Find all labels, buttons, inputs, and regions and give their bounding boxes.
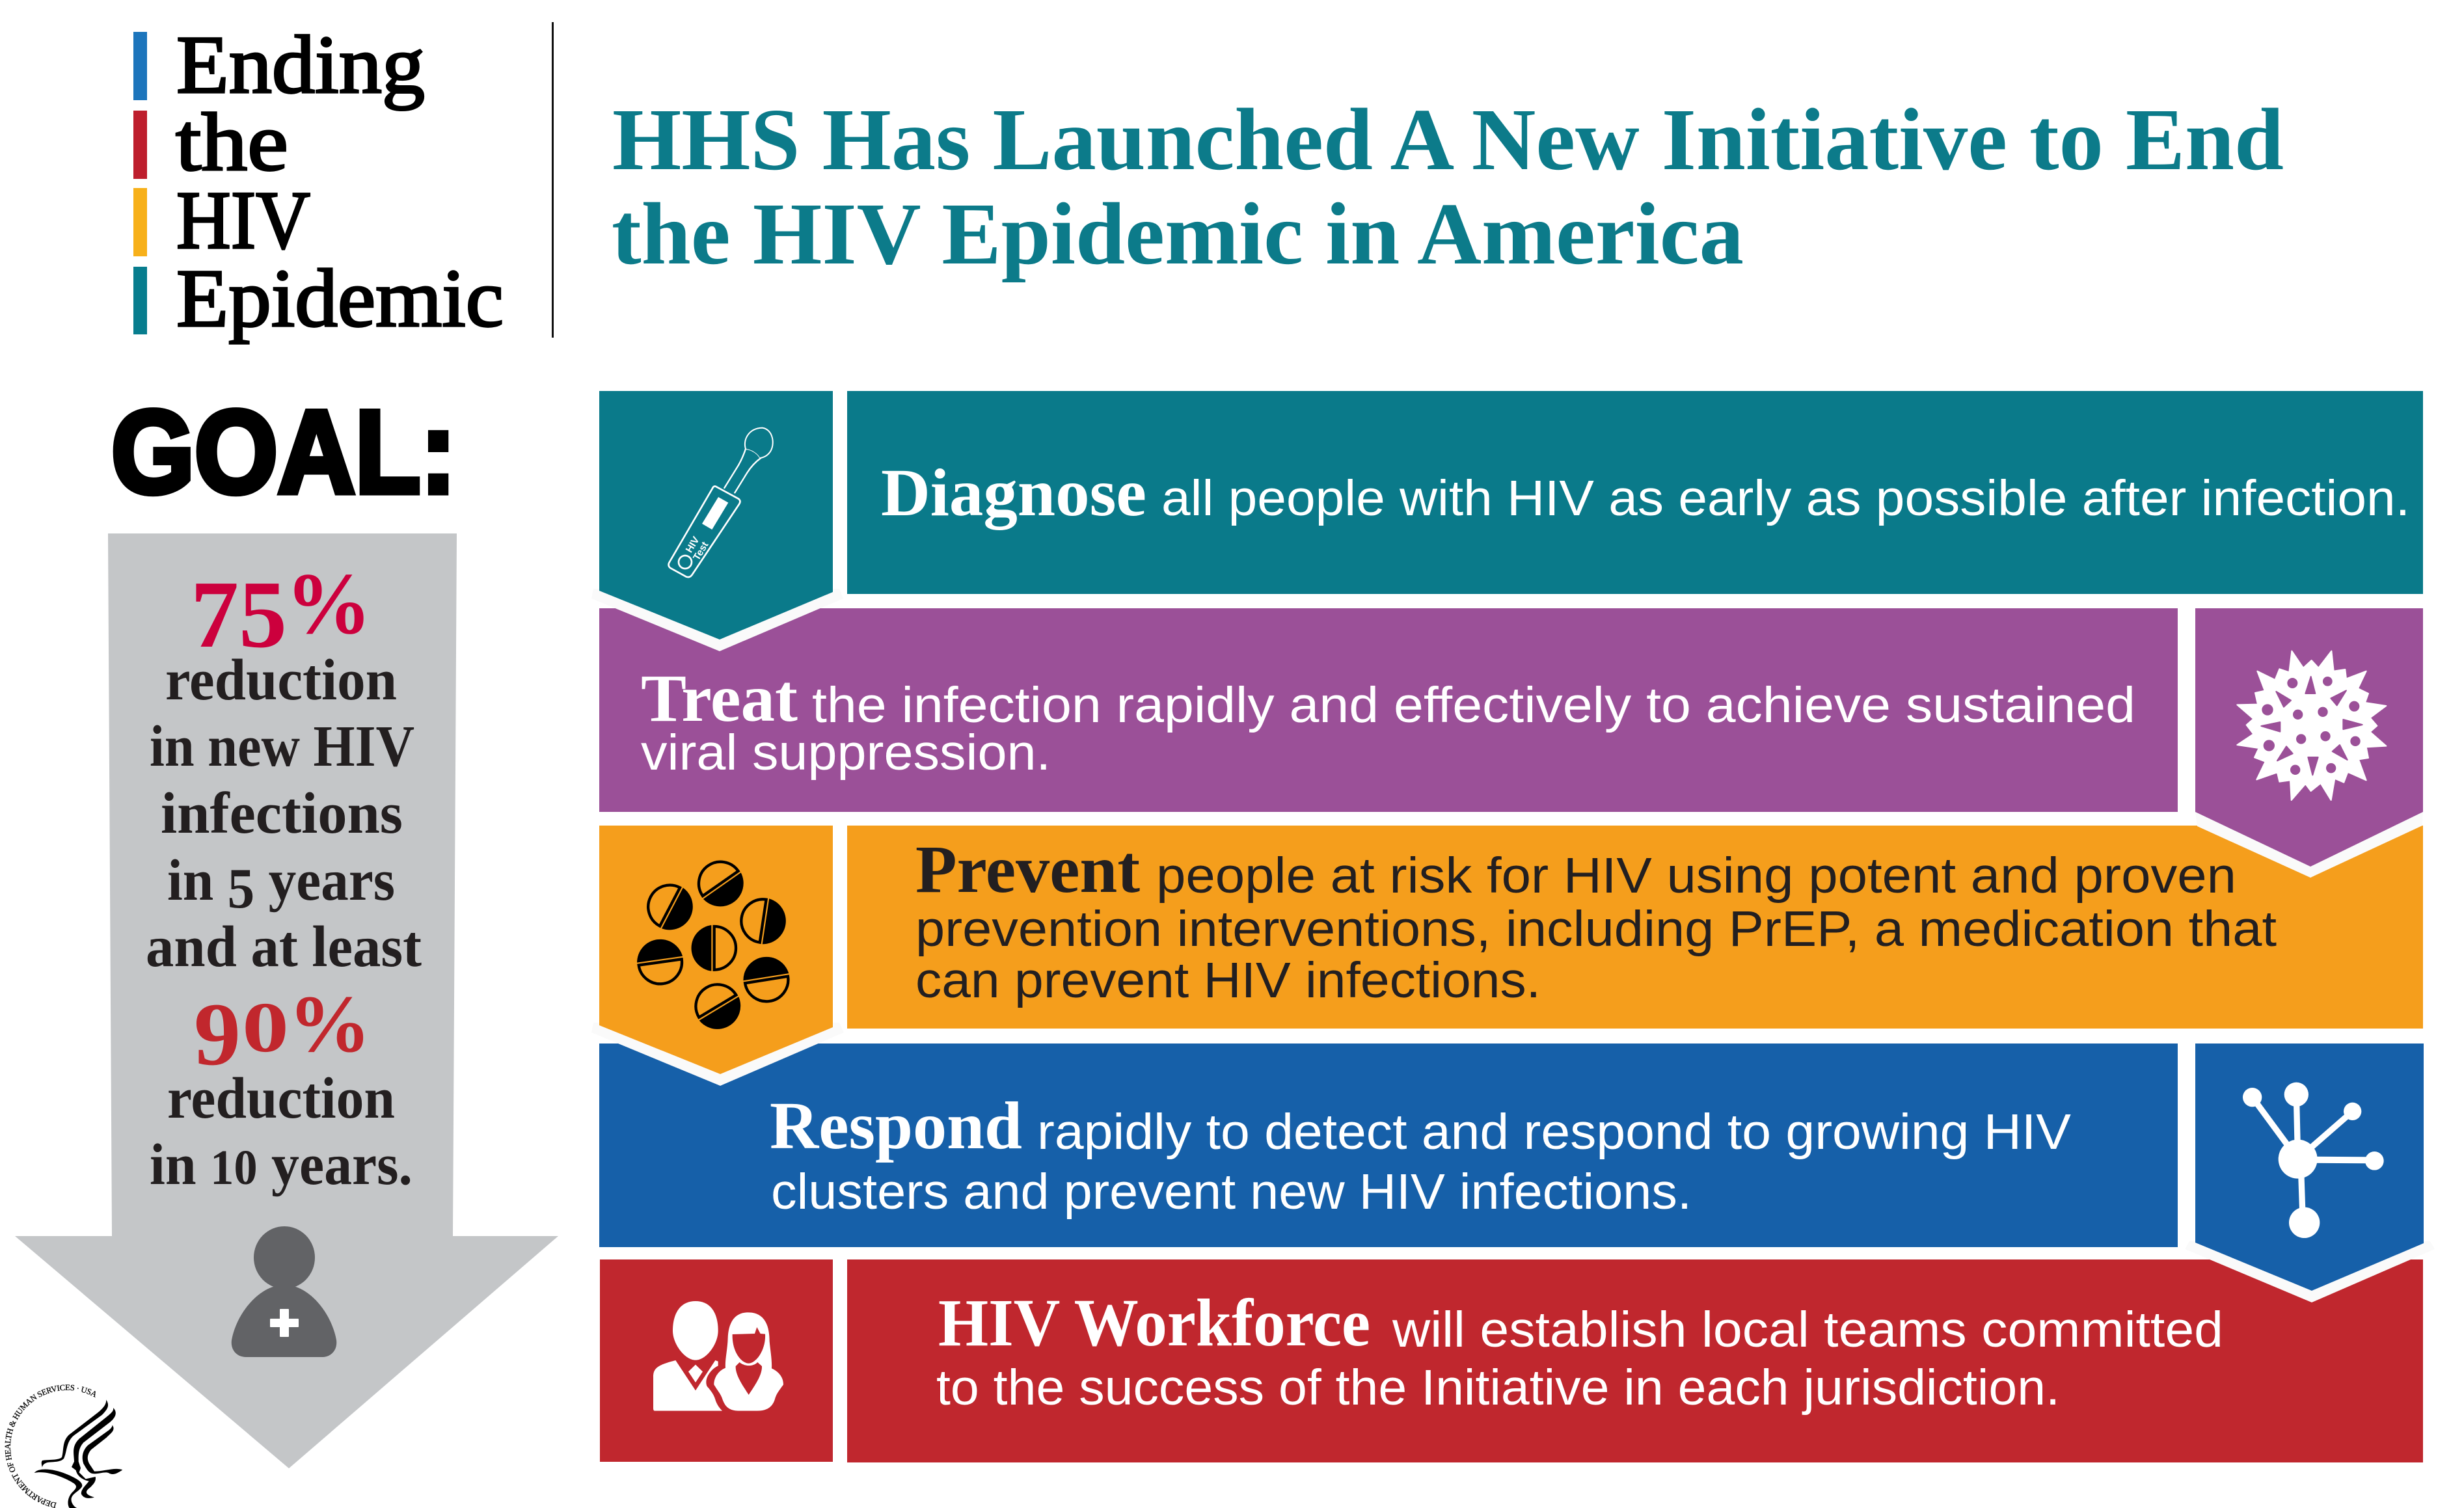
prevent text: prevention interventions, including PrEP, a medication that — [915, 901, 2277, 957]
goal text: 75 percent in 5 years, 90 percent in 10 years: reduction — [167, 1066, 395, 1131]
icon: HIV test swab: HIV — [684, 534, 702, 555]
workforce icon tile — [600, 1259, 833, 1462]
workforce text — [936, 1286, 2223, 1416]
goal text: 75 percent in 5 years, 90 percent in 10 years: in new HIV — [150, 714, 414, 779]
respond band — [599, 1043, 2178, 1247]
icon: split pills — [634, 853, 792, 1038]
goal text: 75 percent in 5 years, 90 percent in 10 years: 5 — [228, 857, 254, 921]
logo: Ending the HIV Epidemic: Ending — [176, 20, 425, 111]
goal text: 75 percent in 5 years, 90 percent in 10 years: infections — [161, 781, 403, 846]
goal text: 75 percent in 5 years, 90 percent in 10 years: 75 — [191, 561, 287, 668]
prevent text: people at risk for HIV using potent and proven — [1156, 848, 2236, 904]
workforce text: to the success of the Initiative in each jurisdiction. — [936, 1360, 2060, 1416]
workforce text: will establish local teams committed — [1392, 1302, 2223, 1358]
workforce band — [847, 1259, 2423, 1462]
treat text: the infection rapidly and effectively to achieve sustained — [812, 677, 2135, 733]
prevent text: Prevent — [915, 832, 1140, 907]
title — [612, 91, 2284, 283]
goal arrow panel — [15, 533, 558, 1468]
logo: Ending the HIV Epidemic: Epidemic — [176, 253, 504, 344]
treat icon tile — [2195, 608, 2423, 867]
icon: virus — [2237, 651, 2386, 800]
goal text: 75 percent in 5 years, 90 percent in 10 years: in — [167, 848, 216, 913]
icon: two health workers — [653, 1301, 783, 1411]
treat text — [641, 661, 2135, 781]
goal text: 75 percent in 5 years, 90 percent in 10 years: years — [254, 848, 395, 913]
HHS logo with eagle and circular text: DEPARTMENT OF HEALTH & HUMAN SERVICES · USA — [5, 1384, 96, 1508]
diagnose band — [847, 391, 2423, 594]
prevent text — [915, 832, 2277, 1008]
title: HHS Has Launched A New Initiative to End — [612, 91, 2284, 189]
goal text: 75 percent in 5 years, 90 percent in 10 years: in 10 years. — [150, 1133, 413, 1197]
prevent icon tile — [599, 826, 833, 1074]
panel: Respond — [599, 1043, 2435, 1302]
respond text — [770, 1088, 2072, 1220]
treat text: Treat — [641, 661, 798, 736]
prevent band — [847, 826, 2423, 1029]
respond text: Respond — [770, 1088, 1022, 1163]
goal text: 75 percent in 5 years, 90 percent in 10 years: 0 — [242, 988, 289, 1067]
goal heading: GOAL: — [111, 386, 456, 518]
panel: Diagnose — [591, 391, 2423, 651]
goal text: 75 percent in 5 years, 90 percent in 10 years — [146, 556, 422, 1197]
goal text: 75 percent in 5 years, 90 percent in 10 years: reduction — [165, 648, 397, 712]
respond text: clusters and prevent new HIV infections. — [771, 1164, 1692, 1220]
icon: cluster network — [2243, 1083, 2384, 1238]
goal text: 75 percent in 5 years, 90 percent in 10 years: % — [286, 556, 372, 653]
logo: Ending the HIV Epidemic — [133, 20, 504, 344]
diagnose icon tile — [599, 391, 833, 640]
logo: Ending the HIV Epidemic: the — [176, 97, 288, 188]
icon: HIV test swab: Test — [691, 540, 711, 563]
diagnose text — [881, 455, 2410, 530]
workforce text: HIV Workforce — [938, 1286, 1370, 1360]
diagnose text: Diagnose — [881, 455, 1146, 530]
goal text: 75 percent in 5 years, 90 percent in 10 years: and at least — [146, 915, 422, 979]
respond text: rapidly to detect and respond to growing HIV — [1037, 1104, 2072, 1160]
goal text: 75 percent in 5 years, 90 percent in 10 years: % — [288, 980, 371, 1070]
prevent text: can prevent HIV infections. — [915, 952, 1541, 1008]
respond icon tile — [2195, 1043, 2424, 1291]
icon: HIV test swab — [669, 428, 773, 577]
arrow shape — [15, 533, 558, 1468]
logo: Ending the HIV Epidemic: HIV — [176, 175, 310, 266]
treat text: viral suppression. — [641, 725, 1051, 781]
treat band — [599, 608, 2178, 812]
panel: Treat — [599, 608, 2423, 878]
goal text: 75 percent in 5 years, 90 percent in 10 years: 9 — [194, 984, 241, 1084]
icon: person with medical cross — [232, 1226, 336, 1357]
title: the HIV Epidemic in America — [612, 185, 1744, 283]
diagnose text: all people with HIV as early as possible after infection. — [1161, 470, 2410, 526]
panel: HIV Workforce — [600, 1259, 2423, 1462]
panel: Prevent — [591, 826, 2423, 1086]
